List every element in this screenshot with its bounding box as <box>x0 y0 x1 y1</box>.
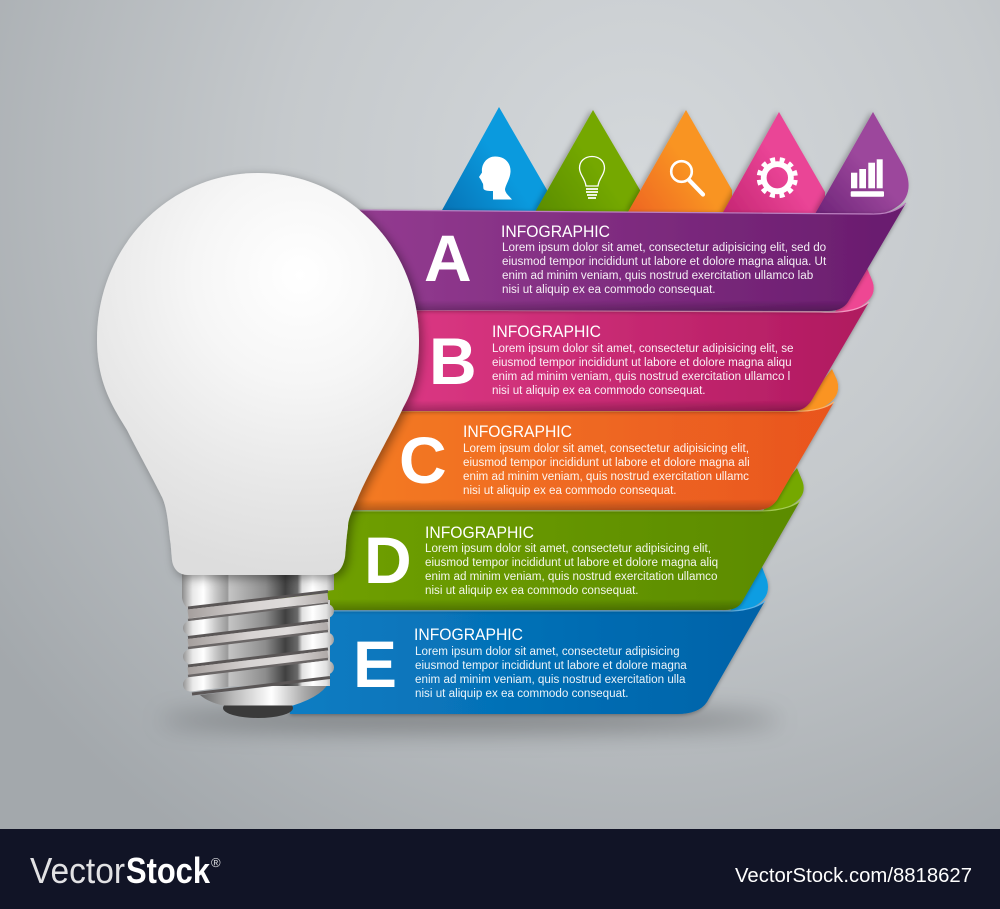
letter A: A <box>424 221 472 295</box>
text block B <box>492 322 794 397</box>
text block A: INFOGRAPHIC <box>501 222 610 241</box>
text block D: nisi ut aliquip ex ea commodo consequat. <box>425 584 639 597</box>
text block B: eiusmod tempor incididunt ut labore et dolore magna aliqu <box>492 356 792 369</box>
text block E: INFOGRAPHIC <box>414 625 523 644</box>
tab: green triangle with bulb icon <box>535 110 640 212</box>
text block E: Lorem ipsum dolor sit amet, consectetur adipisicing <box>415 645 680 658</box>
footer bar <box>0 829 1000 909</box>
letter C: C <box>399 423 447 497</box>
text block C: INFOGRAPHIC <box>463 422 572 441</box>
icon: light bulb outline <box>580 156 604 198</box>
text block A: Lorem ipsum dolor sit amet, consectetur adipisicing elit, sed do <box>502 241 826 254</box>
ribbon A: purple <box>300 203 906 311</box>
ground shadow <box>160 708 780 732</box>
footer logo: Vector <box>30 850 125 891</box>
text block C: Lorem ipsum dolor sit amet, consectetur adipisicing elit, <box>463 442 749 455</box>
tab: purple fold with bar chart icon <box>815 112 909 215</box>
tab: pink triangle with gear icon <box>722 112 825 214</box>
letter D: D <box>364 523 412 597</box>
icon: bar chart <box>851 159 884 197</box>
light bulb <box>97 173 419 718</box>
ribbon B: magenta <box>300 268 874 411</box>
bulb screw base <box>182 570 334 718</box>
text block D: enim ad minim veniam, quis nostrud exercitation ullamco <box>425 570 717 583</box>
icon: magnifier <box>671 161 703 194</box>
text block C: nisi ut aliquip ex ea commodo consequat. <box>463 484 677 497</box>
text block B: INFOGRAPHIC <box>492 322 601 341</box>
letter B: B <box>429 324 477 398</box>
text block A: nisi ut aliquip ex ea commodo consequat. <box>502 283 716 296</box>
text block E <box>414 625 687 700</box>
text block A <box>501 222 827 296</box>
tab: orange triangle with magnifier icon <box>628 110 732 212</box>
text block B: nisi ut aliquip ex ea commodo consequat. <box>492 384 706 397</box>
text block E: nisi ut aliquip ex ea commodo consequat. <box>415 687 629 700</box>
text block D <box>425 523 718 597</box>
text block B: enim ad minim veniam, quis nostrud exercitation ullamco l <box>492 370 790 383</box>
text block E: enim ad minim veniam, quis nostrud exercitation ulla <box>415 673 686 686</box>
text block D: Lorem ipsum dolor sit amet, consectetur adipisicing elit, <box>425 542 711 555</box>
text block A: eiusmod tempor incididunt ut labore et dolore magna aliqua. Ut <box>502 255 827 268</box>
footer url: VectorStock.com/8818627 <box>735 865 972 887</box>
text block C <box>463 422 750 497</box>
text block B: Lorem ipsum dolor sit amet, consectetur adipisicing elit, se <box>492 342 794 355</box>
footer logo <box>30 850 221 891</box>
text block C: enim ad minim veniam, quis nostrud exercitation ullamc <box>463 470 749 483</box>
ribbon E: blue <box>280 567 768 714</box>
text block A: enim ad minim veniam, quis nostrud exercitation ullamco lab <box>502 269 813 282</box>
ribbon C: orange <box>300 369 838 510</box>
text block E: eiusmod tempor incididunt ut labore et dolore magna <box>415 659 687 672</box>
ribbon D: green <box>280 468 804 610</box>
letter E: E <box>353 627 397 701</box>
text block C: eiusmod tempor incididunt ut labore et dolore magna ali <box>463 456 750 469</box>
icon: gear <box>759 159 796 196</box>
text block D: eiusmod tempor incididunt ut labore et dolore magna aliq <box>425 556 718 569</box>
text block D: INFOGRAPHIC <box>425 523 534 542</box>
bulb glass <box>97 173 419 575</box>
tab: blue triangle with person icon <box>441 107 547 212</box>
footer logo: ® <box>211 855 221 870</box>
footer logo: Stock <box>126 850 211 891</box>
icon: head <box>479 156 512 200</box>
